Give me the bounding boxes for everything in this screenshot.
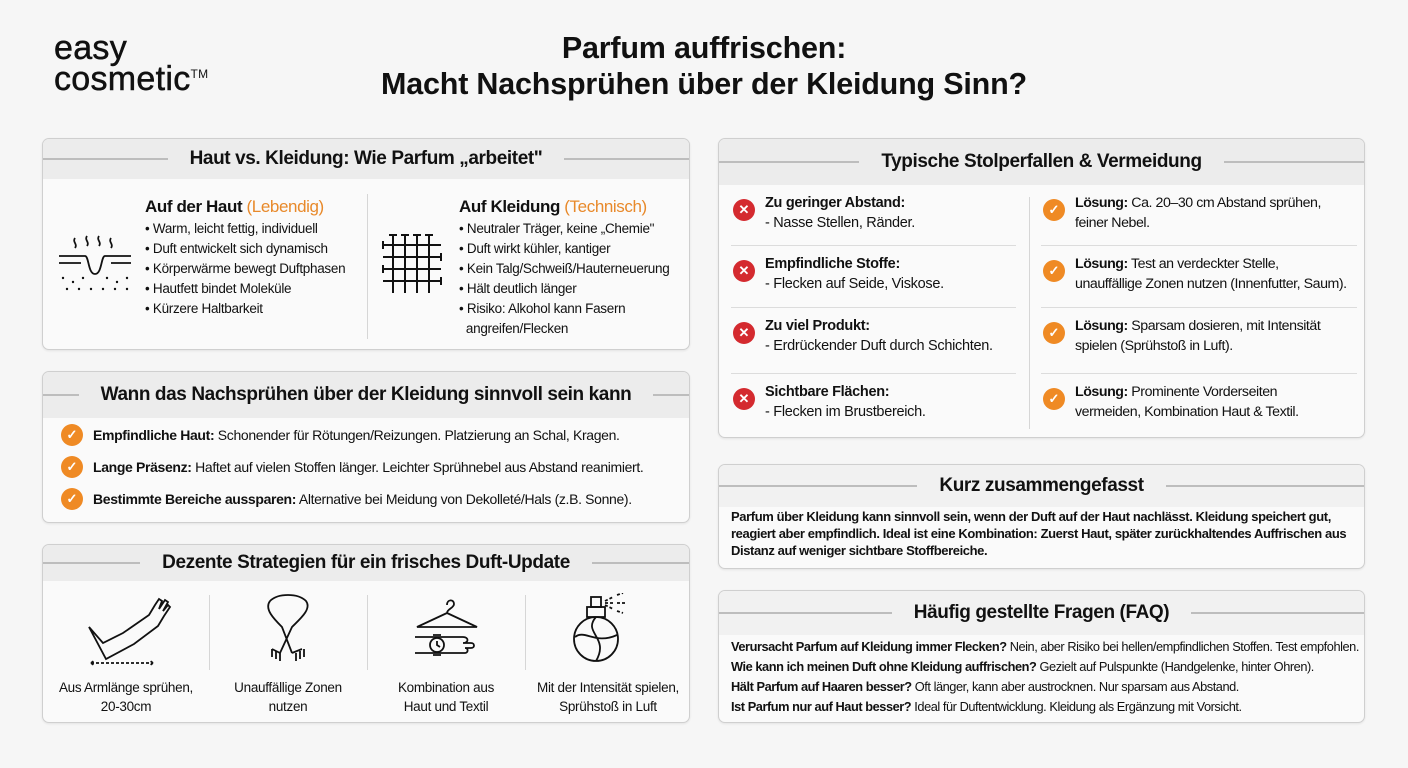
panel: Strategien: Kombination aus [398,680,494,695]
pitfalls: - Flecken auf Seide, Viskose. [765,276,944,292]
text: Auf Kleidung: • Hält deutlich länger [459,281,576,296]
panel: Strategien: Sprühstoß in Luft [559,699,657,714]
pitfalls: Zu geringer Abstand: [765,195,905,211]
solutions: ✓ [1049,202,1059,217]
title: Macht Nachsprühen über der Kleidung Sinn? [381,67,1027,101]
text: Auf Kleidung: • Risiko: Alkohol kann Fasern [459,301,625,316]
pitfalls: - Nasse Stellen, Ränder. [765,215,915,231]
pitfalls: Zu viel Produkt: [765,318,870,334]
panel: Wann sinnvoll [42,371,690,523]
panel: Strategien: Unauffällige Zonen [234,680,342,695]
text: Auf der Haut: Auf der Haut (Lebendig) [145,197,324,216]
icon: fabric weave [382,234,442,293]
panel: Strategien [42,544,690,723]
text: Auf Kleidung: • Kein Talg/Schweiß/Hauterneuerung [459,261,669,276]
FAQ list: Verursacht Parfum auf Kleidung immer Flecken? Nein, aber Risiko bei hellen/empfindlichen Stoffen. Test empfohlen. [731,639,1359,654]
heading: Kurz zusammengefasst [939,475,1144,496]
solutions: ✓ [1049,263,1059,278]
logo: cosmeticTM [54,60,208,98]
pitfalls: Sichtbare Flächen: [765,384,889,400]
summary text: Distanz auf weniger sichtbare Stoffbereiche. [731,543,987,558]
heading [43,545,689,581]
FAQ list: Ist Parfum nur auf Haut besser? Ideal für Duftentwicklung. Kleidung als Ergänzung mit Vorsicht. [731,699,1242,714]
summary text: reagiert aber empfindlich. Ideal ist eine Kombination: Zuerst Haut, später zurückhaltendes Auffrischen aus [731,526,1346,541]
text: Auf der Haut: • Körperwärme bewegt Duftphasen [145,261,345,276]
icon: perfume bottle [573,593,625,662]
solutions: unauffällige Zonen nutzen (Innenfutter, Saum). [1075,276,1347,292]
pitfalls: ✕ [739,263,749,278]
text: Auf Kleidung: Auf Kleidung (Technisch) [459,197,647,216]
panel: Stolperfallen [718,138,1365,438]
solutions: ✓ [1049,325,1059,340]
text: Auf Kleidung: • Duft wirkt kühler, kantiger [459,241,610,256]
pitfalls: Empfindliche Stoffe: [765,256,900,272]
heading: Haut vs. Kleidung: Wie Parfum „arbeitet" [190,148,542,169]
FAQ list: Hält Parfum auf Haaren besser? Oft länger, kann aber austrocknen. Nur sparsam aus Abstand. [731,679,1239,694]
list: reasons: ✓ [67,427,77,442]
heading: Wann das Nachsprühen über der Kleidung sinnvoll sein kann [101,384,631,405]
heading [719,591,1364,635]
pitfalls [733,195,993,420]
pitfalls: ✕ [739,391,749,406]
panel: FAQ [718,590,1365,723]
solutions: Lösung: Ca. 20–30 cm Abstand sprühen, [1075,195,1321,211]
FAQ list [731,639,1359,714]
pitfalls: - Flecken im Brustbereich. [765,404,926,420]
text: Auf der Haut: • Hautfett bindet Moleküle [145,281,291,296]
captions: Aus Armlänge sprühen, [59,680,193,695]
captions [59,680,193,714]
text: Auf der Haut: • Duft entwickelt sich dynamisch [145,241,328,256]
list: reasons [61,424,643,510]
list: reasons: Lange Präsenz: Haftet auf vielen Stoffen länger. Leichter Sprühnebel aus Abstand reanimiert. [93,459,643,475]
solutions: vermeiden, Kombination Haut & Textil. [1075,404,1299,420]
pitfalls: ✕ [739,325,749,340]
solutions: Lösung: Prominente Vorderseiten [1075,384,1277,400]
panel: Kurz zusammengefasst [718,464,1365,569]
title [381,31,1027,101]
icon: scarf [267,594,308,661]
heading [719,139,1364,185]
text: Auf Kleidung: angreifen/Flecken [466,321,568,336]
heading: Dezente Strategien für ein frisches Duft-Update [162,552,570,573]
FAQ list: Wie kann ich meinen Duft ohne Kleidung auffrischen? Gezielt auf Pulspunkte (Handgelenke, hinter Ohren). [731,659,1314,674]
panel: Strategien: Haut und Textil [404,699,488,714]
icon: arm [88,598,172,666]
list: reasons: ✓ [67,491,77,506]
title: Parfum auffrischen: [562,31,846,65]
solutions: feiner Nebel. [1075,215,1150,231]
solutions: spielen (Sprühstoß in Luft). [1075,338,1233,354]
pitfalls: ✕ [739,202,749,217]
logo: easy [54,29,127,67]
icon: skin [59,236,131,290]
heading: Häufig gestellte Fragen (FAQ) [914,602,1169,623]
text: Auf Kleidung: • Neutraler Träger, keine „Chemie" [459,221,654,236]
text: Auf der Haut: • Warm, leicht fettig, individuell [145,221,318,236]
heading [719,465,1364,507]
panel: Haut vs Kleidung [42,138,690,350]
text: Auf Kleidung [459,197,669,336]
heading [43,139,689,179]
logo [54,29,208,98]
icon: hanger and watch [415,600,478,656]
summary text [731,509,1346,558]
solutions [1043,195,1347,420]
heading [43,372,689,418]
solutions: Lösung: Test an verdeckter Stelle, [1075,256,1279,272]
panel: Strategien: nutzen [269,699,307,714]
list: reasons: Bestimmte Bereiche aussparen: Alternative bei Meidung von Dekolleté/Hals (z.B. Sonne). [93,491,632,507]
solutions: ✓ [1049,391,1059,406]
list: reasons: Empfindliche Haut: Schonender für Rötungen/Reizungen. Platzierung an Schal, Kragen. [93,427,620,443]
text: Auf der Haut [145,197,345,316]
pitfalls: - Erdrückender Duft durch Schichten. [765,338,993,354]
summary text: Parfum über Kleidung kann sinnvoll sein, wenn der Duft auf der Haut nachlässt. Kleidung speichert gut, [731,509,1331,524]
panel: Strategien: Mit der Intensität spielen, [537,680,679,695]
text: Auf der Haut: • Kürzere Haltbarkeit [145,301,263,316]
heading: Typische Stolperfallen & Vermeidung [881,151,1202,172]
solutions: Lösung: Sparsam dosieren, mit Intensität [1075,318,1320,334]
list: reasons: ✓ [67,459,77,474]
captions: 20-30cm [101,699,151,714]
